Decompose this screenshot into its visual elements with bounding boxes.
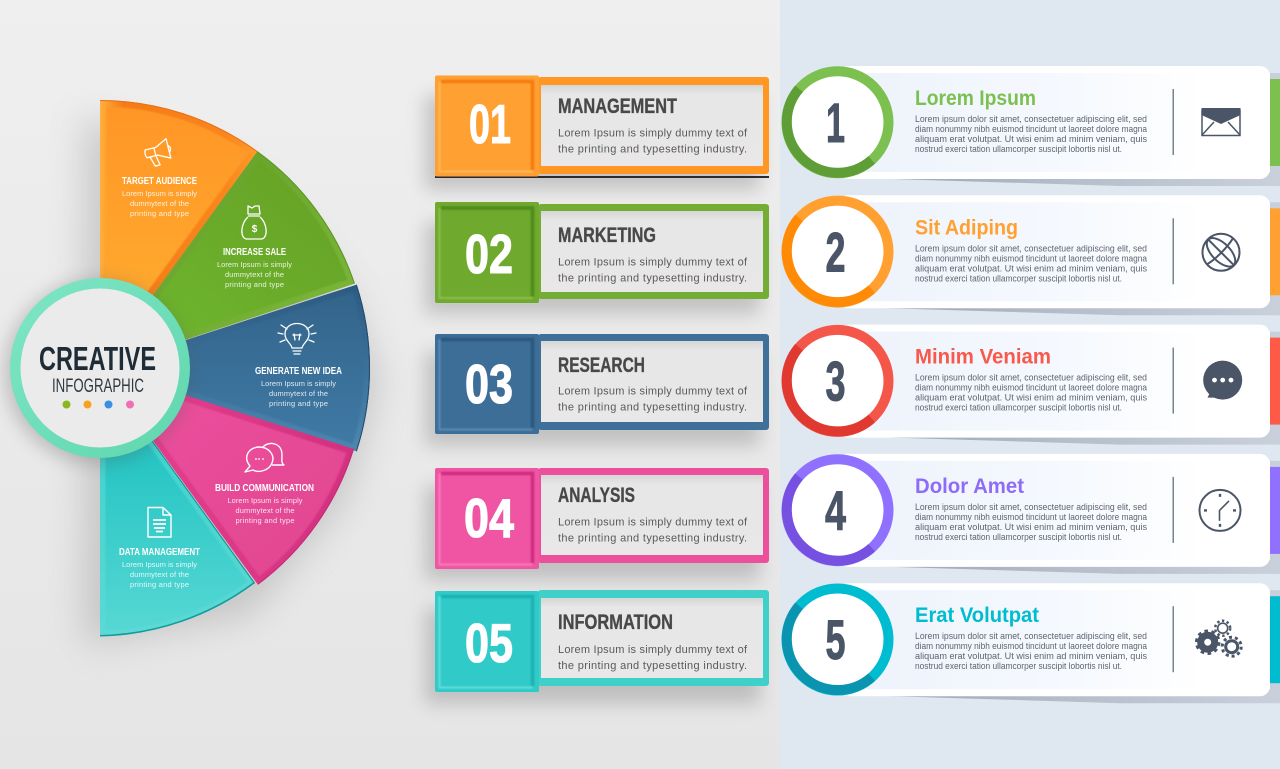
description: target audience: dummytext of the [130,199,189,208]
panel: 05 information [435,590,769,692]
subtitle: infographic: INFOGRAPHIC [52,375,144,397]
body text: Lorem ipsum dolor sit amet, consectetuer adipiscing elit, sed [915,114,1147,124]
panel shadows [425,95,760,704]
body text: aliquam erat volutpat. Ut wisi enim ad minim veniam, quis [915,263,1148,273]
panel: 02 marketing [435,202,769,303]
description: data management: dummytext of the [130,570,189,579]
wedge: build communication [153,395,354,585]
body text: the printing and typesetting industry. [558,402,747,414]
soft shadows [84,115,380,645]
icon: money bag: $ [252,224,258,235]
body text: Lorem Ipsum is simply dummy text of [558,516,748,528]
body text: nostrud exerci tation ullamcorper suscipit lobortis nisl ut. [915,532,1122,542]
description: target audience: Lorem Ipsum is simply [122,189,197,198]
number: 04 [464,487,514,549]
number: 03 [465,353,513,415]
body text [915,631,1148,671]
label: increase sale: INCREASE SALE [223,246,286,258]
description: generate new idea: printing and type [269,399,328,408]
body text: nostrud exerci tation ullamcorper suscipit lobortis nisl ut. [915,144,1122,154]
heading: RESEARCH [558,353,645,377]
description: increase sale: Lorem Ipsum is simply [217,260,292,269]
body text [915,373,1148,413]
body text: Lorem ipsum dolor sit amet, consectetuer adipiscing elit, sed [915,502,1147,512]
description: data management [122,560,197,589]
body text [558,128,748,156]
description: target audience [122,189,197,218]
title: Sit Adiping [915,216,1018,239]
title: creative: CREATIVE [39,340,156,377]
body text: Lorem ipsum dolor sit amet, consectetuer adipiscing elit, sed [915,631,1147,641]
icon: light bulb [278,324,316,354]
body text: Lorem Ipsum is simply dummy text of [558,644,748,656]
centre badge [5,278,190,464]
description: build communication: Lorem Ipsum is simply [228,496,303,505]
card 1: lorem ipsum [786,66,1280,186]
body text [915,243,1148,283]
number: 02 [465,223,513,285]
panel: 03 research [435,334,769,434]
panel: 04 analysis [435,468,769,569]
icon: globe [1202,233,1240,271]
label: generate new idea: GENERATE NEW IDEA [255,365,342,377]
number ring [786,588,888,690]
description: increase sale [217,260,292,289]
icon: document [148,508,171,537]
body text: nostrud exerci tation ullamcorper suscipit lobortis nisl ut. [915,403,1122,413]
number ring: 5 [826,608,846,671]
number ring: 3 [826,350,846,413]
number ring: 2 [826,220,846,283]
body text: diam nonummy nibh euismod tincidunt ut laoreet dolore magna [915,383,1147,393]
body text: the printing and typesetting industry. [558,144,747,156]
description: generate new idea: dummytext of the [269,389,328,398]
wedge: increase sale [153,151,355,340]
card 4: dolor amet [786,454,1280,574]
description: build communication [228,496,303,525]
semicircle diagram [5,100,370,636]
description: increase sale: printing and type [225,280,284,289]
description: generate new idea: Lorem Ipsum is simply [261,379,336,388]
title: Erat Volutpat [915,604,1039,627]
number ring [786,459,888,561]
heading: MANAGEMENT [558,94,677,118]
icon: envelope [1202,108,1240,136]
icon: speech bubbles [245,443,284,472]
panel: 01 management [435,76,769,178]
title: Minim Veniam [915,346,1051,369]
number ring [786,201,888,303]
icon: money bag [242,206,266,239]
number ring [786,71,888,173]
body text [558,644,748,672]
body text: aliquam erat volutpat. Ut wisi enim ad minim veniam, quis [915,522,1148,532]
icon: megaphone [143,138,174,168]
body text: aliquam erat volutpat. Ut wisi enim ad minim veniam, quis [915,651,1148,661]
body text: Lorem ipsum dolor sit amet, consectetuer adipiscing elit, sed [915,373,1147,383]
body text: Lorem ipsum dolor sit amet, consectetuer adipiscing elit, sed [915,243,1147,253]
heading: INFORMATION [558,610,673,634]
number: 01 [469,93,511,155]
title: Dolor Amet [915,475,1024,498]
body text: aliquam erat volutpat. Ut wisi enim ad minim veniam, quis [915,134,1148,144]
description: target audience: printing and type [130,209,189,218]
icon: chat bubble [1203,361,1242,400]
description: build communication: dummytext of the [236,506,294,515]
number: 05 [465,612,513,674]
label: build communication: BUILD COMMUNICATION [215,482,314,494]
card 2: sit adiping [786,195,1280,315]
label: target audience: TARGET AUDIENCE [122,175,197,187]
description: increase sale: dummytext of the [225,270,284,279]
wedge: target audience [100,100,258,296]
body text: diam nonummy nibh euismod tincidunt ut laoreet dolore magna [915,512,1147,522]
number ring: 4 [825,479,846,542]
description: data management: Lorem Ipsum is simply [122,560,197,569]
body text [558,256,748,284]
icon: clock [1200,490,1240,531]
body text: aliquam erat volutpat. Ut wisi enim ad minim veniam, quis [915,393,1148,403]
description: build communication: printing and type [236,516,294,525]
colour dots [62,400,134,408]
card 5: erat volutpat [786,583,1280,703]
body text: diam nonummy nibh euismod tincidunt ut laoreet dolore magna [915,253,1147,263]
heading: MARKETING [558,223,656,247]
body text: the printing and typesetting industry. [558,660,747,672]
title: Lorem Ipsum [915,87,1036,110]
body text: Lorem Ipsum is simply dummy text of [558,128,748,140]
label: data management: DATA MANAGEMENT [119,546,200,558]
number ring: 1 [826,91,845,154]
body text [915,114,1148,154]
number ring [786,330,888,432]
body text [558,516,748,544]
body text: the printing and typesetting industry. [558,272,747,284]
icon: gears [1197,621,1241,656]
wedge: generate new idea [186,284,370,452]
heading: ANALYSIS [558,483,635,507]
body text: nostrud exerci tation ullamcorper suscipit lobortis nisl ut. [915,273,1122,283]
wedge: data management [100,441,255,636]
body text: Lorem Ipsum is simply dummy text of [558,386,748,398]
body text: the printing and typesetting industry. [558,532,747,544]
description: data management: printing and type [130,580,189,589]
body text [558,386,748,414]
body text: diam nonummy nibh euismod tincidunt ut laoreet dolore magna [915,124,1147,134]
body text [915,502,1148,542]
body text: Lorem Ipsum is simply dummy text of [558,256,748,268]
body text: diam nonummy nibh euismod tincidunt ut laoreet dolore magna [915,641,1147,651]
body text: nostrud exerci tation ullamcorper suscipit lobortis nisl ut. [915,661,1122,671]
card 3: minim veniam [786,325,1280,445]
description: generate new idea [261,379,336,408]
